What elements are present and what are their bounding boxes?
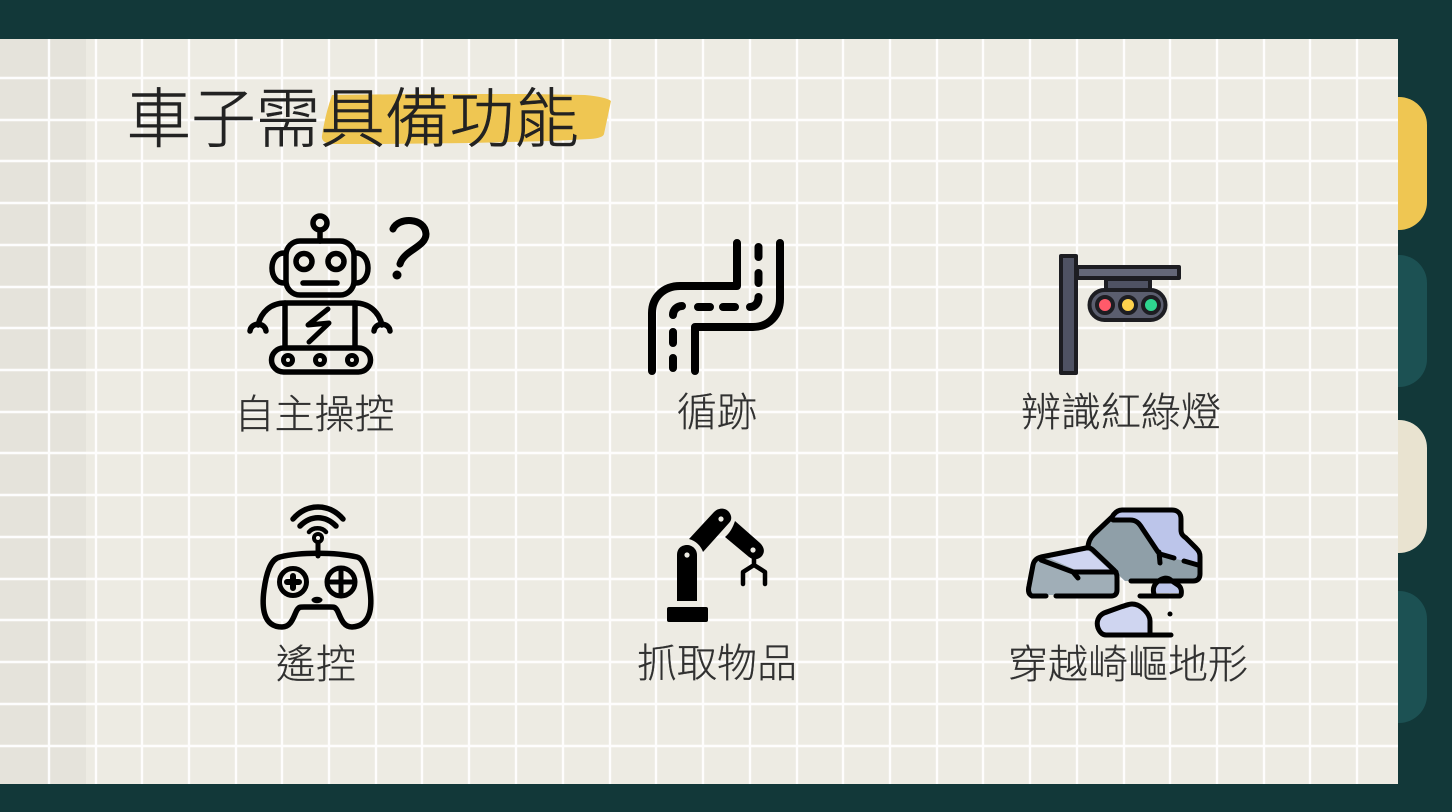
title: 車子需具備功能 [126,84,579,156]
tab: teal lower [1370,591,1427,723]
label: cross rough terrain: 穿越崎嶇地形 [1008,643,1248,687]
icon: line-following road [652,243,780,371]
tab: yellow [1370,97,1427,230]
icon: game controller with wifi [263,507,371,627]
icon: robot with question mark [250,216,426,372]
page binding shade [0,39,86,784]
label: traffic light recognition: 辨識紅綠燈 [1021,391,1221,435]
label: autonomous control: 自主操控 [234,393,394,437]
title highlight brush [322,94,611,144]
icon: robotic arm [667,509,765,622]
label: remote control: 遙控 [276,643,356,687]
tab: teal upper [1370,255,1427,387]
icon: traffic light [1061,256,1179,373]
icon: rough terrain rocks [1028,510,1200,635]
label: grab objects: 抓取物品 [637,642,797,686]
tab: cream [1370,420,1427,553]
label: line following: 循跡 [677,391,757,435]
